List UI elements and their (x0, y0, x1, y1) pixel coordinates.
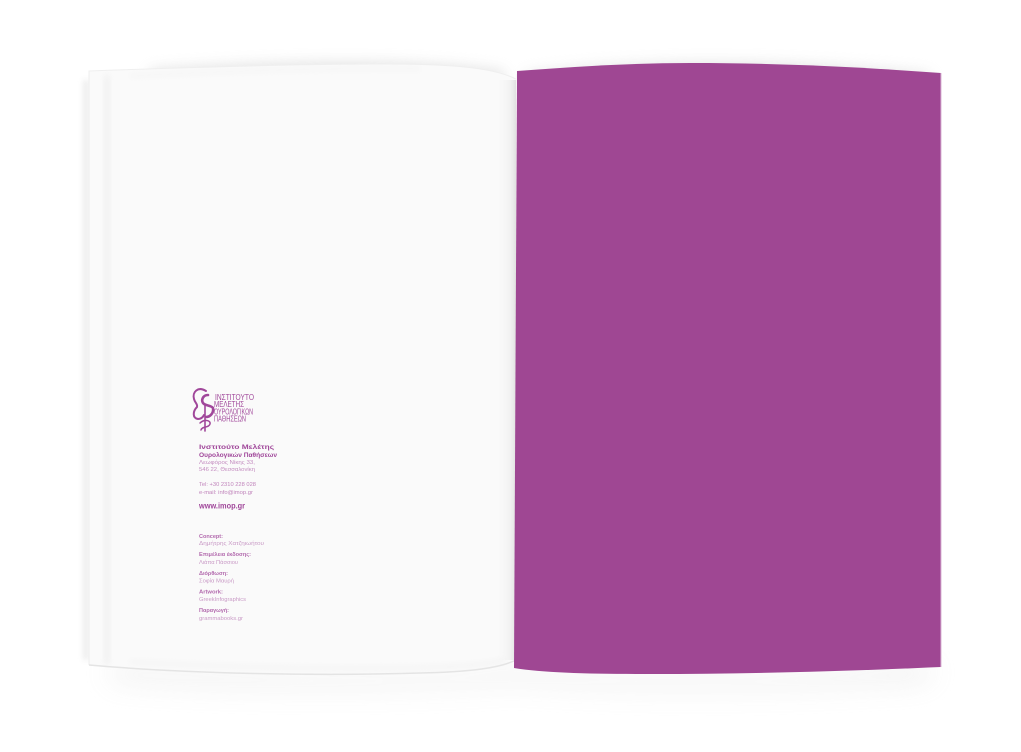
wordmark (214, 393, 254, 424)
icon: kidney and staff emblem (194, 389, 213, 431)
text block: institute name and address: 546 22, Θεσσαλονίκη (199, 467, 255, 473)
text block: institute name and address: Λεωφόρος Νίκης 33, (199, 459, 255, 466)
website address: www.imop.gr (198, 502, 245, 510)
text block: credits: Σοφία Μαυρή (199, 578, 234, 584)
text block: contact details: e-mail: info@imop.gr (199, 490, 253, 496)
text block: credits: Παραγωγή: (199, 608, 229, 614)
wordmark: ΙΝΣΤΙΤΟΥΤΟ (215, 393, 254, 402)
panel: right purple page (514, 63, 941, 674)
panel: left page (89, 64, 516, 674)
wordmark: ΠΑΘΗΣΕΩΝ (214, 414, 246, 424)
drop shadow under spread (86, 63, 930, 687)
text block: credits: Artwork: (199, 590, 223, 596)
text block: contact details: Tel: +30 2310 228 028 (199, 482, 256, 488)
text block: credits: Concept: (199, 534, 223, 540)
text block: institute name and address: Ουρολογικών Παθήσεων (199, 452, 278, 459)
text block: credits: grammabooks.gr (199, 616, 243, 622)
text block: contact details (199, 482, 256, 496)
wordmark: ΜΕΛΕΤΗΣ (214, 400, 244, 409)
text block: credits: Λιάπα Πάσσιου (199, 559, 238, 566)
text block: credits: GreekInfographics (199, 597, 246, 603)
text block: credits (199, 534, 264, 622)
text block: credits: Επιμέλεια έκδοσης: (199, 552, 251, 558)
text block: institute name and address (199, 444, 278, 473)
text block: credits: Διόρθωση: (199, 571, 228, 577)
text block: institute name and address: Ινστιτούτο Μελέτης (199, 444, 274, 451)
logo: institute emblem and wordmark (194, 389, 254, 431)
text block: credits: Δημήτρης Χατζηιωήτου (199, 540, 264, 547)
wordmark: ΟΥΡΟΛΟΓΙΚΩΝ (214, 408, 253, 416)
